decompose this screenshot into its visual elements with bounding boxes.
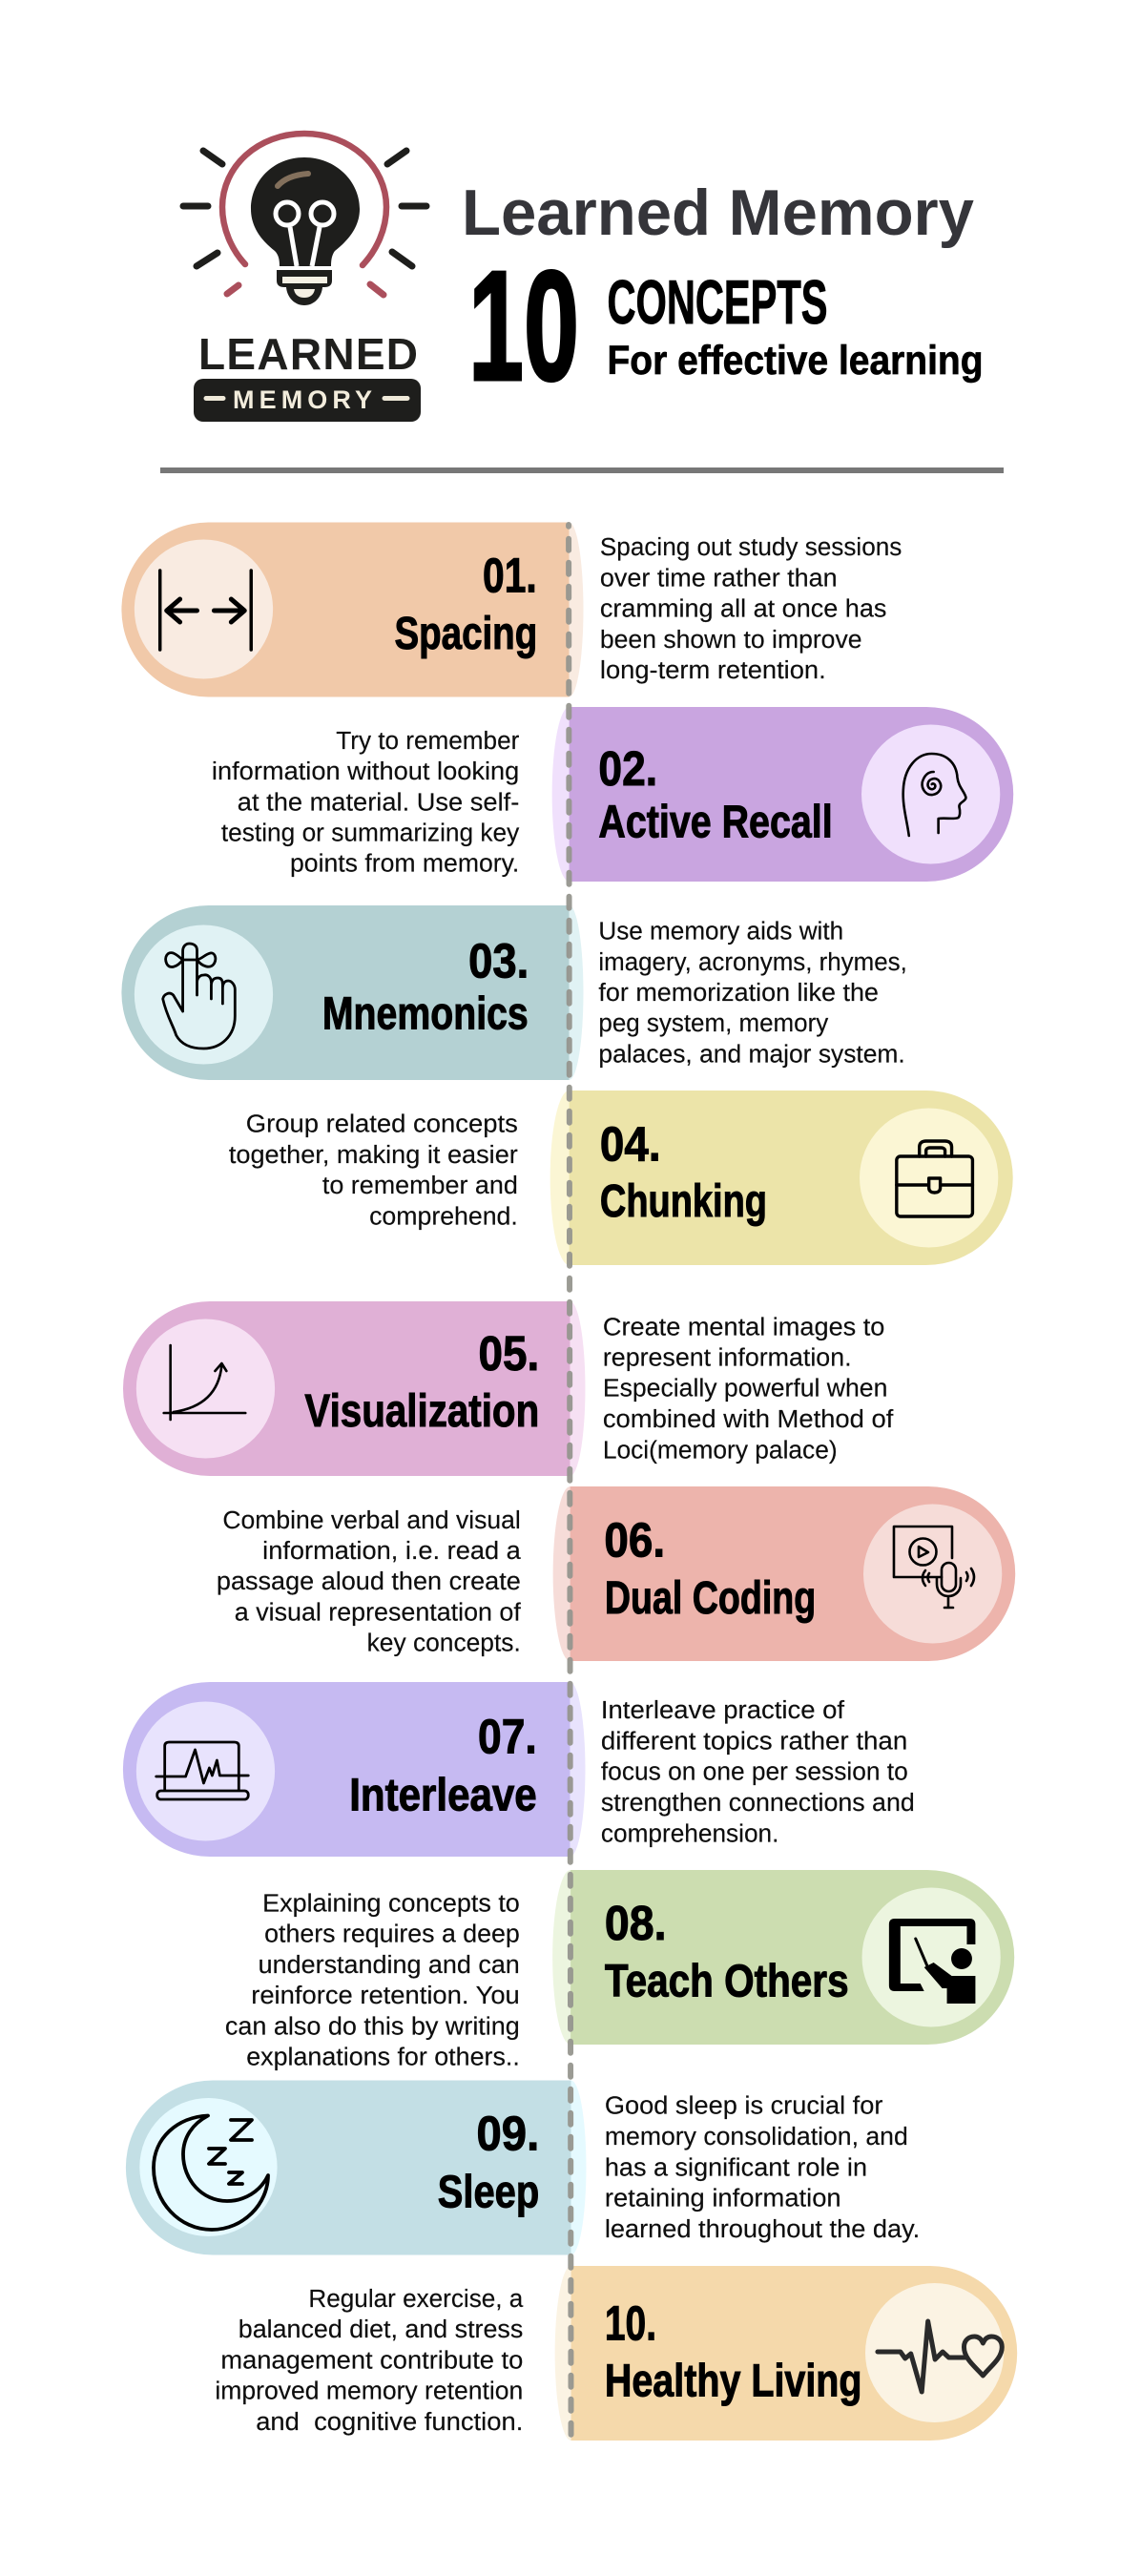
name: Interleave (349, 1770, 537, 1821)
logo base highlights (282, 277, 327, 298)
pill end (570, 1301, 585, 1476)
description: combined with Method of (603, 1406, 894, 1433)
panel: 01 Spacing (121, 523, 902, 696)
description: peg system, memory (598, 1010, 828, 1037)
name: Sleep (438, 2167, 539, 2218)
name: Mnemonics (322, 988, 529, 1040)
icon disc (865, 2283, 1004, 2422)
description: Spacing out study sessions (600, 534, 902, 561)
number: 02. (598, 741, 657, 796)
logo arc (222, 134, 386, 265)
description: improved memory retention (215, 2378, 523, 2405)
pill (570, 707, 1013, 882)
icon: spacing arrows (160, 571, 251, 650)
icon: arrow pair (167, 599, 244, 622)
logo: Learned Memory lightbulb (183, 134, 426, 422)
pill (570, 1870, 1014, 2045)
description: balanced diet, and stress (239, 2316, 523, 2343)
description (217, 1507, 522, 1657)
description: palaces, and major system. (598, 1041, 905, 1069)
pill end (570, 523, 583, 696)
pill (570, 1486, 1015, 1661)
description (225, 1890, 520, 2071)
description: management contribute to (220, 2347, 523, 2375)
panel: 04 Chunking (229, 1091, 1013, 1265)
panel: 08 Teach Others (225, 1870, 1014, 2071)
description (215, 2286, 524, 2436)
description: explanations for others.. (246, 2044, 520, 2071)
title: Learned Memory: Learned Memory (462, 177, 974, 249)
description: testing or summarizing key (221, 820, 519, 847)
number: 10. (605, 2296, 656, 2351)
description: together, making it easier (229, 1142, 518, 1169)
logo rays (183, 151, 426, 266)
description: for memorization like the (598, 980, 879, 1007)
description: can also do this by writing (225, 2013, 520, 2041)
description: retaining information (605, 2185, 841, 2212)
icon disc (135, 540, 273, 679)
description: comprehension. (601, 1820, 778, 1848)
number: 03. (468, 933, 529, 988)
pill end (553, 1486, 570, 1661)
name: Teach Others (605, 1956, 849, 2007)
icon disc (863, 1504, 1002, 1643)
pill (126, 2080, 571, 2255)
name: Dual Coding (605, 1573, 816, 1624)
panel: 10 Healthy Living (215, 2266, 1017, 2441)
pill (123, 1301, 570, 1476)
icon: moon and Z's (154, 2116, 268, 2230)
pill end (555, 2266, 571, 2441)
subheading: For effective learning (607, 338, 983, 384)
name: Healthy Living (605, 2356, 862, 2407)
description: a visual representation of (235, 1599, 522, 1627)
description: strengthen connections and (601, 1790, 915, 1817)
panel: 09 Sleep (126, 2080, 920, 2255)
number: 09. (477, 2106, 539, 2161)
description (229, 1111, 518, 1231)
number: 06. (604, 1512, 665, 1568)
icon disc (136, 1702, 275, 1841)
panel: 03 Mnemonics (121, 905, 907, 1080)
description: Especially powerful when (603, 1375, 887, 1402)
heading CONCEPTS: CONCEPTS (607, 267, 828, 337)
logo base (277, 270, 332, 305)
pill end (550, 1091, 570, 1265)
icon disc (862, 1887, 1001, 2026)
name: Visualization (304, 1386, 539, 1437)
logo bulb (251, 157, 360, 266)
pill (121, 905, 570, 1080)
description: Regular exercise, a (308, 2286, 524, 2313)
icon disc (861, 725, 1000, 864)
description: Group related concepts (246, 1111, 518, 1138)
description: imagery, acronyms, rhymes, (598, 949, 907, 976)
description: Use memory aids with (598, 918, 843, 945)
pill (123, 1682, 570, 1857)
pill end (570, 905, 583, 1080)
logo plate dashes (206, 396, 407, 401)
number: 05. (479, 1326, 539, 1381)
big number 10: 10 (468, 239, 579, 413)
icon disc (136, 1319, 275, 1458)
logo accents (227, 284, 384, 295)
description: Explaining concepts to (262, 1890, 520, 1918)
pill (121, 523, 570, 696)
description: Loci(memory palace) (603, 1437, 838, 1465)
icon: video and microphone (894, 1527, 974, 1608)
logo word LEARNED: LEARNED (198, 329, 418, 379)
description: memory consolidation, and (605, 2124, 908, 2150)
panel: 07 Interleave (123, 1682, 915, 1857)
description (600, 534, 902, 684)
description: Create mental images to (603, 1314, 884, 1341)
pill (570, 1091, 1013, 1265)
description: been shown to improve (600, 627, 862, 654)
icon disc (139, 2098, 278, 2236)
description: over time rather than (600, 565, 838, 592)
icon: teacher at board (889, 1919, 975, 2004)
panel: 06 Dual Coding (217, 1486, 1015, 1661)
header divider (160, 467, 1004, 473)
panel: 05 Visualization (123, 1301, 894, 1476)
description: and cognitive function. (256, 2409, 523, 2436)
description: different topics rather than (601, 1728, 907, 1755)
icon: laptop heartbeat (156, 1742, 248, 1799)
description: passage aloud then create (217, 1568, 521, 1595)
description: Good sleep is crucial for (605, 2092, 883, 2120)
icon: growth chart (164, 1345, 245, 1420)
description: focus on one per session to (601, 1758, 908, 1786)
icon: heartbeat and heart (878, 2321, 1002, 2392)
description (601, 1697, 915, 1848)
logo plate (194, 379, 421, 422)
description: others requires a deep (264, 1921, 520, 1948)
description: Try to remember (336, 728, 520, 755)
number: 08. (605, 1896, 667, 1950)
description (603, 1314, 894, 1465)
icon: head with spiral (903, 754, 965, 836)
description (598, 918, 907, 1069)
icon: hand with ribbon (163, 944, 235, 1049)
description: to remember and (322, 1173, 518, 1199)
logo filaments (276, 202, 334, 266)
icon disc (860, 1109, 998, 1248)
name: Active Recall (598, 797, 833, 848)
description: reinforce retention. You (251, 1983, 520, 2009)
dashed timeline (569, 525, 571, 2435)
number: 01. (483, 548, 537, 603)
description: information without looking (212, 758, 519, 785)
icon: briefcase (897, 1141, 972, 1216)
number: 04. (600, 1116, 661, 1172)
icon disc (135, 925, 273, 1065)
description: represent information. (603, 1344, 852, 1372)
pill end (552, 707, 570, 882)
description: understanding and can (259, 1952, 520, 1979)
description: learned throughout the day. (605, 2216, 920, 2243)
logo word MEMORY: MEMORY (233, 385, 372, 414)
logo highlight (278, 174, 308, 186)
description: long-term retention. (600, 657, 826, 684)
pill end (552, 1870, 570, 2045)
timeline rows (121, 523, 1017, 2441)
description: cramming all at once has (600, 595, 886, 623)
description: has a significant role in (605, 2154, 867, 2182)
description: at the material. Use self- (238, 789, 519, 817)
name: Chunking (600, 1176, 767, 1227)
number: 07. (478, 1709, 537, 1764)
pill end (570, 1682, 585, 1857)
description (212, 728, 520, 878)
description: information, i.e. read a (262, 1538, 521, 1565)
description: points from memory. (290, 850, 519, 878)
description: Combine verbal and visual (222, 1507, 521, 1534)
pill end (571, 2080, 586, 2255)
panel: 02 Active Recall (212, 707, 1013, 882)
description: Interleave practice of (601, 1697, 845, 1724)
description: comprehend. (369, 1203, 518, 1231)
name: Spacing (394, 609, 537, 659)
description (605, 2092, 920, 2243)
pill (571, 2266, 1017, 2441)
description: key concepts. (367, 1630, 521, 1657)
